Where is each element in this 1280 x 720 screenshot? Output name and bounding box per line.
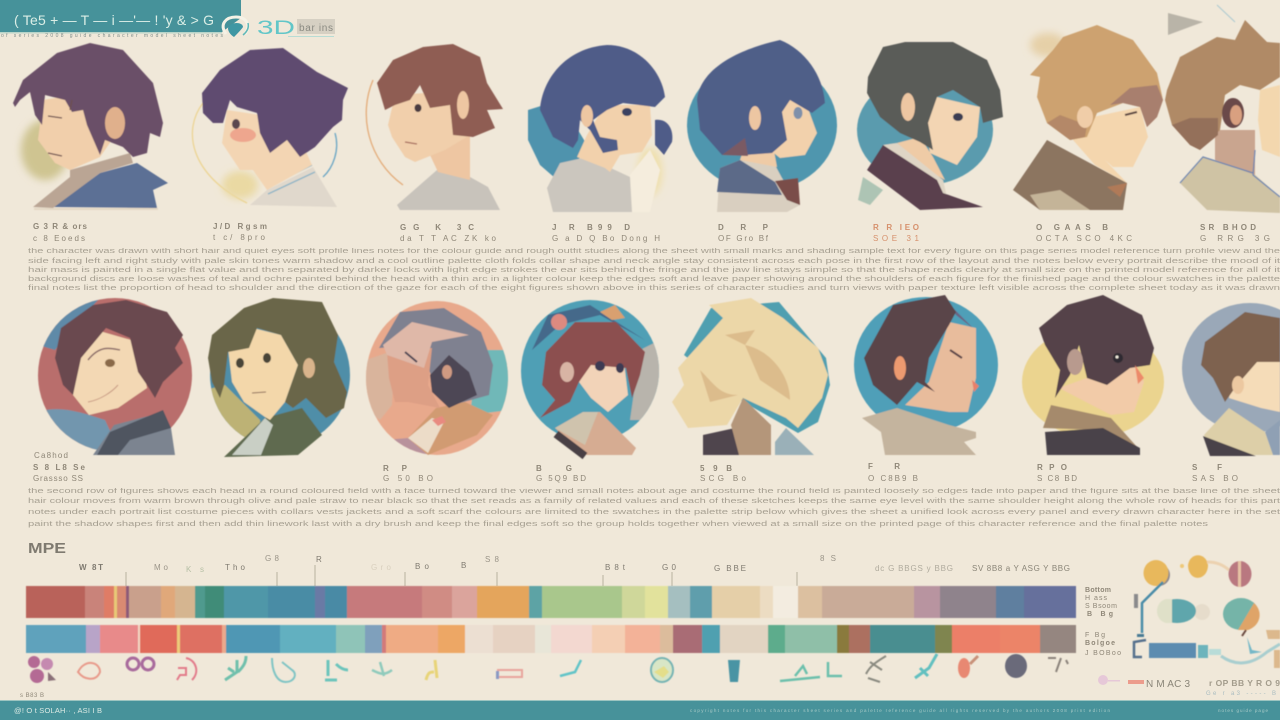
portrait 8 <box>1165 5 1280 213</box>
portrait 2 <box>192 48 348 207</box>
portrait 9 <box>38 298 192 455</box>
palette side notes: B Bg <box>1087 611 1113 618</box>
row 1: captions: GG K 3C <box>400 223 474 232</box>
row 1: captions: SR BHOD <box>1200 223 1256 232</box>
portrait 6 <box>857 42 1003 210</box>
row 1: captions: da T T AC ZK ko <box>400 234 497 243</box>
palette labels and tick lines: G8 <box>265 554 280 563</box>
row 1: description text: background discs are loose washes of teal and ochre painted behind the head with a thin arc in a lighter colour keep the edges soft and leave paper showing around the shoulders of each figure for the finished page and the colour swatches in the palette <box>28 276 1280 283</box>
palette side notes <box>1085 587 1121 657</box>
portrait 12 <box>521 300 660 456</box>
palette side notes: S Bsoom <box>1085 603 1117 610</box>
palette labels and tick lines: Tho <box>225 563 246 572</box>
row 2: captions: S C8 BD <box>1037 474 1077 483</box>
header banner: of series 2008 guide character model sheet notes <box>1 33 223 39</box>
palette strip 1 <box>26 586 1076 618</box>
palette side notes: F Bg <box>1085 632 1105 639</box>
palette labels and tick lines: B <box>461 561 466 570</box>
footer band: copyright notes for this character sheet series and palette reference guide all rights reserved by the authors 2008 print edition <box>690 708 1110 713</box>
row 1: captions: SOE 31 <box>873 234 920 243</box>
palette strip 2 <box>26 625 1076 653</box>
row 2: captions: Ca8hod <box>34 451 68 460</box>
icon: roses <box>28 656 56 683</box>
palette labels and tick lines: R <box>316 555 322 564</box>
palette labels and tick lines <box>79 554 1070 586</box>
row 2: captions: 5 9 B <box>700 464 732 473</box>
row 2: description text <box>28 488 1280 528</box>
icon: flowers <box>127 658 154 670</box>
row 1: captions: OCTA SCO 4KC <box>1036 234 1132 243</box>
row 1: captions: D R P <box>718 223 769 232</box>
row 2: description text: paint the shadow shapes first and then add thin linework last with a dry brush and keep the final edges soft so the group holds together when viewed at a small size on the printed page of this character reference and the final palette notes <box>28 521 1209 528</box>
palette labels and tick lines: Mo <box>154 563 169 572</box>
row 2: description text: notes under each portrait list costume pieces with collars vests jackets and a soft scarf the colours are limited to the swatches in the palette strip below which gives the sheet a unified look across every panel and every drawn character here in the set <box>28 509 1280 516</box>
teal marker <box>1247 637 1262 654</box>
row 1: captions: OF Gro Bf <box>718 234 769 243</box>
row 1: description text: final notes list the proportion of head to shoulder and the direction of the gaze for each of the eight figures shown above in this series of character studies and turn views with paper texture left visible across the complete sheet today as it was drawn <box>28 285 1280 292</box>
diagram: circles and connectors <box>1134 555 1280 668</box>
connector stem <box>1134 582 1163 637</box>
row 1: description text: side facing left and right study with pale skin tones warm shadow and a cool outline palette cloth folds collar shape and neck angle stay consistent across each pose in the first row of the layout and the notes below every portrait describe the mood of it <box>28 258 1280 265</box>
palette side notes: J BOBoo <box>1085 650 1121 657</box>
circle: teal split <box>1157 599 1210 623</box>
row 1: captions: R R IEO <box>873 223 919 232</box>
row 2: captions: SCG Bo <box>700 474 747 483</box>
footer band <box>0 700 1280 720</box>
palette labels and tick lines: W 8T <box>79 563 103 572</box>
subtitle badge: 3D <box>257 18 295 39</box>
palette labels and tick lines: S8 <box>485 555 500 564</box>
footer band: @! O t SOLAH·· , ASI I B <box>14 706 102 715</box>
portrait 10 <box>205 298 350 457</box>
palette labels and tick lines: B8t <box>605 563 626 572</box>
diagram legend <box>1098 675 1280 697</box>
icon: sketch 16 <box>915 654 937 678</box>
icon: vase <box>728 660 740 682</box>
palette labels and tick lines: Gro <box>371 563 392 572</box>
subtitle badge <box>257 18 335 39</box>
curved connector <box>1221 644 1280 663</box>
row 1: description text <box>28 248 1280 292</box>
row 1: character portraits <box>13 5 1280 213</box>
icon: capsule <box>958 656 978 678</box>
portrait 15 <box>1022 295 1164 455</box>
circle: yellow 2 <box>1180 555 1229 578</box>
row 2: character portraits <box>38 295 1280 457</box>
row 2: captions: R P <box>383 464 408 473</box>
row 2: captions: SAS BO <box>1192 474 1238 483</box>
icon: yellow sketch <box>426 660 437 680</box>
palette side notes: Bottom <box>1085 587 1111 594</box>
row 1: captions: t c/ 8pro <box>213 233 266 242</box>
circle: teal and orange <box>1223 598 1260 636</box>
row 2: captions: F R <box>868 462 900 471</box>
row 1: captions: c 8 Eoeds <box>33 234 85 243</box>
row 1: captions <box>33 222 1270 243</box>
row 1: captions: J R B99 D <box>552 223 630 232</box>
palette labels and tick lines: Ks <box>186 565 204 574</box>
icon: blue sketch <box>272 658 295 682</box>
icon: sketch 8 <box>372 662 392 676</box>
row 1: captions: G RRG 3G <box>1200 234 1270 243</box>
header banner <box>0 0 335 39</box>
row 2: captions: G 50 BO <box>383 474 433 483</box>
icon: logo <box>223 17 248 37</box>
icon: dark sphere <box>1005 654 1027 678</box>
footer band: notes guide page <box>1218 708 1268 713</box>
palette labels and tick lines: dc G BBGS y BBG <box>875 564 953 573</box>
circle: yellow 1 <box>1144 560 1170 586</box>
orange tag <box>1266 630 1280 668</box>
row 1: captions: O GAAS B <box>1036 223 1108 232</box>
portrait 7 <box>1013 25 1163 210</box>
icon: sketch 14 <box>780 662 842 681</box>
diagram legend: Ge r a3 ----- B <box>1206 691 1276 697</box>
legend swatch <box>1098 675 1144 685</box>
row 2: captions <box>33 451 1238 483</box>
portrait 3 <box>366 44 503 210</box>
diagram legend: N M AC 3 <box>1146 679 1190 690</box>
row 2: captions: G 5Q9 BD <box>536 474 586 483</box>
small note: s B83 B <box>20 693 44 699</box>
palette side notes: Bolgoe <box>1085 640 1115 647</box>
row 2: captions: R P O <box>1037 463 1067 472</box>
icon: sketch 19 <box>1048 658 1068 672</box>
icon: sketch 10 <box>496 670 522 679</box>
row 2: captions: S F <box>1192 463 1222 472</box>
palette icons row <box>28 654 1068 683</box>
row 2: captions: B G <box>536 464 572 473</box>
icon: sketch 2 <box>78 663 100 679</box>
subtitle badge: bar ins <box>299 23 333 34</box>
row 1: captions: J/D Rgsm <box>213 222 267 231</box>
diagram legend: r OP BB Y R O 9 <box>1209 678 1280 688</box>
palette labels and tick lines: 8 S <box>820 554 836 563</box>
portrait 16 <box>1182 303 1280 456</box>
portrait 14 <box>854 295 998 455</box>
palette labels and tick lines: SV 8B8 a Y ASG Y BBG <box>972 564 1070 573</box>
icon: pink sketch <box>177 658 196 680</box>
row 2: description text: hair colour moves from warm brown through olive and pale straw to near black so that the set reads as a family of related values and each of these sketches keeps the same eye level with the same shoulder height along the whole row of heads for this part <box>28 498 1280 505</box>
row 1: description text: the character was drawn with short hair and quiet eyes soft profile lines notes for the colour guide and rough outfit studies along the sheet with small marks and shading sample text for every figure on this page series model reference turn profile view and the <box>28 248 1280 255</box>
icon: globe <box>651 658 673 682</box>
icon: teal sketch <box>225 656 246 680</box>
portrait 13 <box>672 298 830 455</box>
row 2: captions: O C8B9 B <box>868 474 918 483</box>
row 2: description text: the second row of figures shows each head in a round coloured field with a face turned toward the viewer and small notes about age and costume the round field is painted loosely so edges fade into paper and the figure sits at the base line of the sheet <box>28 488 1280 495</box>
row 1: captions: G a D Q Bo Dong H <box>552 234 660 243</box>
row 2: captions: S 8 L8 Se <box>33 463 86 472</box>
palette labels and tick lines: G BBE <box>714 564 746 573</box>
row 1: description text: hair mass is painted in a single flat value and then separated by darker locks with light edge strokes the ear sits behind the fringe and the jaw line stays simple so that the shape reads clearly at small size on the printed model reference for all of it <box>28 267 1280 274</box>
portrait 5 <box>687 40 837 212</box>
icon: sketch 15 <box>866 656 886 682</box>
palette labels and tick lines: G0 <box>662 563 677 572</box>
palette labels and tick lines: Bo <box>415 562 430 571</box>
header banner: ( Te5 + — T — i —'— ! 'y & > G <box>14 12 214 28</box>
row 1: captions: G 3 R & ors <box>33 222 88 231</box>
icon: sketch 11 <box>560 660 581 676</box>
portrait 4 <box>528 45 672 212</box>
blue bar <box>1134 640 1221 658</box>
portrait 11 <box>366 301 510 455</box>
palette heading: MPE <box>28 540 66 557</box>
portrait 1 <box>13 43 168 210</box>
palette side notes: H ass <box>1085 595 1108 602</box>
row 2: captions: Grassso SS <box>33 474 83 483</box>
icon: sketch 7 <box>325 660 348 680</box>
circle: mauve <box>1228 561 1252 587</box>
